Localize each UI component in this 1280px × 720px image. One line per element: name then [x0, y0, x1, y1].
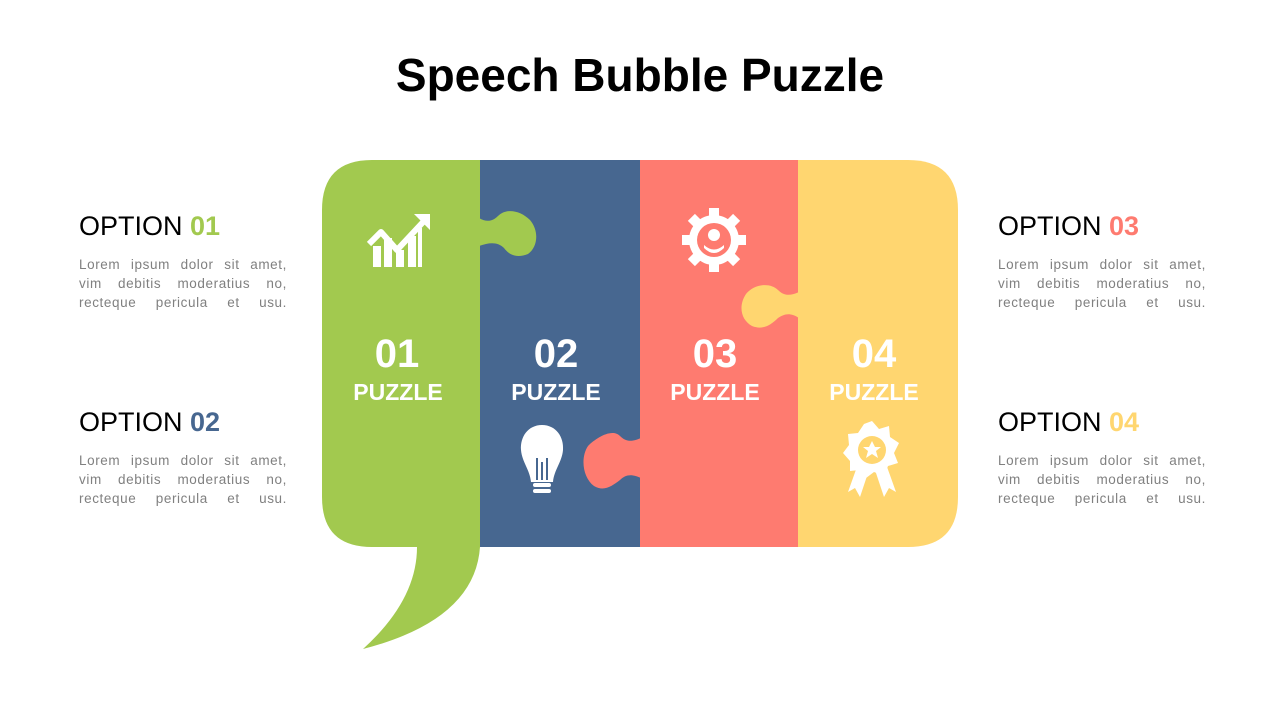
option 02: Lorem ipsum dolor sit amet, vim debitis moderatius no, recteque pericula et usu. [79, 453, 287, 506]
option 02: OPTION 02 [79, 407, 220, 437]
numbers and labels: 04 [852, 332, 897, 376]
icon: award [843, 421, 899, 497]
title: Speech Bubble Puzzle [396, 49, 884, 101]
option 01: Lorem ipsum dolor sit amet, vim debitis moderatius no, recteque pericula et usu. [79, 257, 287, 310]
option 03: Lorem ipsum dolor sit amet, vim debitis moderatius no, recteque pericula et usu. [998, 257, 1206, 310]
numbers and labels: 03 [693, 332, 737, 376]
option 03 [998, 211, 1206, 310]
icon: light bulb [521, 425, 563, 493]
option 02 [79, 407, 287, 506]
piece 03 red [583, 160, 799, 547]
option 04: OPTION 04 [998, 407, 1139, 437]
piece 01 green with tail [322, 160, 536, 649]
option 01: OPTION 01 [79, 211, 220, 241]
option 03: OPTION 03 [998, 211, 1139, 241]
numbers and labels [353, 332, 919, 405]
numbers and labels: PUZZLE [829, 379, 919, 405]
numbers and labels: PUZZLE [353, 379, 443, 405]
numbers and labels: 01 [375, 332, 419, 376]
numbers and labels: PUZZLE [670, 379, 760, 405]
option 04: Lorem ipsum dolor sit amet, vim debitis moderatius no, recteque pericula et usu. [998, 453, 1206, 506]
piece 02 blue [479, 160, 641, 547]
icon: gear [682, 208, 746, 272]
numbers and labels: PUZZLE [511, 379, 601, 405]
option 01 [79, 211, 287, 310]
piece 04 yellow [741, 160, 958, 547]
numbers and labels: 02 [534, 332, 578, 376]
icon: growth chart [369, 214, 430, 267]
option 04 [998, 407, 1206, 506]
